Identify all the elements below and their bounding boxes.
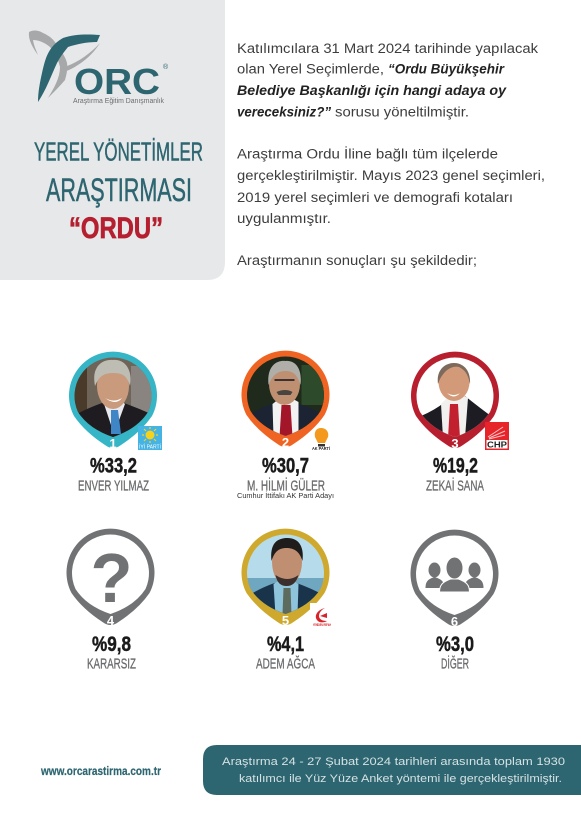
intro text — [237, 41, 545, 268]
icon: people — [426, 557, 484, 592]
intro text: olan Yerel Seçimlerde, — [237, 62, 384, 76]
footer note — [203, 745, 581, 795]
intro text: Araştırmanın sonuçları şu şekildedir; — [237, 253, 477, 268]
badge: İYİ Parti: İYİ PARTİ — [139, 444, 161, 450]
logo: ORC: ® — [163, 63, 169, 71]
logo: ORC: ORC — [74, 61, 160, 102]
badge: AK Parti: AK PARTİ — [312, 445, 330, 451]
logo: ORC — [29, 30, 169, 105]
intro text: Katılımcılara 31 Mart 2024 tarihinde yapılacak — [237, 41, 538, 56]
title — [34, 136, 203, 245]
name 5: ADEM AĞCA — [256, 656, 315, 672]
icon: question mark: ? — [90, 539, 132, 617]
pin 6: 6 — [451, 614, 458, 629]
intro text: sorusu yöneltilmiştir. — [335, 104, 469, 120]
badge: Yeniden Refah: YENİDEN REFAH — [313, 623, 331, 627]
pin 4 — [66, 529, 154, 628]
result 5: %4,1 — [267, 633, 304, 656]
badge: CHP: CHP — [487, 440, 508, 450]
name 2: M. HİLMİ GÜLER — [247, 476, 325, 494]
title: “ORDU” — [69, 212, 163, 245]
pin 6 — [410, 530, 498, 629]
badge: AK Parti — [312, 428, 330, 451]
pin 2 — [242, 351, 330, 450]
badge: CHP — [485, 422, 509, 450]
intro text: Belediye Başkanlığı için hangi adaya oy — [237, 83, 508, 98]
intro text: gerçekleştirilmiştir. Mayıs 2023 genel seçimleri, — [237, 168, 545, 183]
pin 2: 2 — [282, 435, 289, 450]
candidate 3: Zekai Sana — [411, 352, 509, 494]
subtitle 2: Cumhur İttifakı AK Parti Adayı — [237, 491, 334, 500]
panel: header — [0, 0, 225, 280]
pin 3 — [411, 352, 499, 451]
result 2: %30,7 — [262, 454, 309, 478]
badge: Yeniden Refah — [310, 603, 333, 628]
result 4: %9,8 — [92, 633, 131, 656]
pin 3: 3 — [451, 436, 459, 451]
title: ARAŞTIRMASI — [46, 172, 192, 208]
candidate 1: Enver Yılmaz — [69, 352, 162, 494]
footer note: katılımcı ile Yüz Yüze Anket yöntemi ile gerçekleştirilmiştir. — [239, 773, 562, 785]
intro text: uygulanmıştır. — [237, 211, 331, 226]
option 4: Kararsız — [66, 529, 154, 672]
pin 4: 4 — [107, 613, 115, 628]
website url: www.orcarastirma.com.tr — [40, 764, 161, 778]
candidate 5: Adem Ağca — [242, 529, 333, 672]
intro text: vereceksiniz?” — [237, 104, 331, 120]
logo: ORC: Araştırma Eğitim Danışmanlık — [73, 98, 164, 105]
name 6: DİĞER — [441, 654, 469, 672]
name 1: ENVER YILMAZ — [78, 478, 149, 494]
pin 5 — [242, 529, 330, 628]
result 3: %19,2 — [433, 454, 478, 478]
pin 1: 1 — [109, 436, 117, 451]
intro text: “Ordu Büyükşehir — [388, 62, 505, 76]
name 3: ZEKAİ SANA — [426, 476, 484, 494]
intro text: Araştırma Ordu İline bağlı tüm ilçelerde — [237, 146, 498, 162]
result 6: %3,0 — [436, 633, 474, 656]
name 4: KARARSIZ — [87, 656, 136, 672]
result 1: %33,2 — [90, 454, 137, 478]
pin 5: 5 — [282, 613, 289, 628]
pin 1 — [69, 352, 157, 451]
candidate 2: M. Hilmi Güler — [237, 351, 334, 500]
option 6: Diğer — [410, 530, 498, 672]
intro text: 2019 yerel seçimleri ve demografi kotaları — [237, 190, 513, 205]
badge: İYİ Parti — [138, 426, 162, 450]
footer note: Araştırma 24 - 27 Şubat 2024 tarihleri arasında toplam 1930 — [222, 756, 565, 768]
title: YEREL YÖNETİMLER — [34, 136, 203, 166]
